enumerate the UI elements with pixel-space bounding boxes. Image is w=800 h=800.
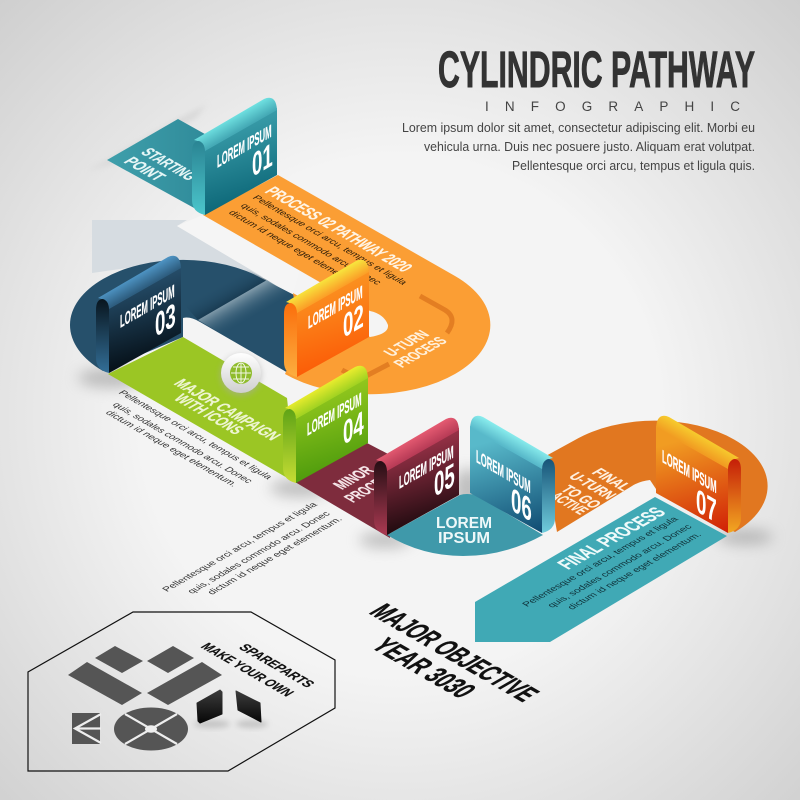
block 06 <box>470 416 555 533</box>
panel: dark blue U-turn band <box>70 260 300 377</box>
white strip beside the arrow <box>177 215 300 293</box>
grey arrow backdrop <box>92 220 263 277</box>
heading: process 02 pathway: PROCESS 02 PATHWAY 2020 <box>261 184 417 275</box>
label: lorem ipsum: LOREM <box>436 515 492 532</box>
intro text: vehicula urna. Duis nec posuere justo. Aliquam erat volutpat. <box>424 140 755 154</box>
block 06: LOREM IPSUM <box>476 446 531 498</box>
label: final u-turn to go active: TO GO <box>557 483 604 511</box>
panel: orange U-turn band <box>203 175 490 394</box>
block 03: LOREM IPSUM <box>120 280 175 332</box>
label: lorem ipsum <box>436 515 492 547</box>
label: spareparts make your own: SPAREPARTS <box>235 641 319 690</box>
intro text: Pellentesque orci arcu, tempus et ligula quis. <box>512 159 755 173</box>
block 01: 01 <box>252 135 273 184</box>
label: minor process <box>329 463 401 505</box>
intro text: Lorem ipsum dolor sit amet, consectetur adipiscing elit. Morbi eu <box>402 121 755 135</box>
block 02: LOREM IPSUM <box>308 281 363 333</box>
label: final u-turn to go active <box>546 466 634 517</box>
label: u-turn process: U-TURN <box>381 328 434 359</box>
label: minor process: MINOR <box>329 463 378 492</box>
heading: major objective: MAJOR OBJECTIVE <box>362 600 546 706</box>
block 05: 05 <box>434 455 455 504</box>
final process body text: quis, sodales commodo arcu. Donec <box>545 523 695 610</box>
heading: major objective <box>362 600 546 706</box>
final process body text: dictum id neque eget elementum. <box>565 531 704 612</box>
text block: lower left description: Pellentesque orci arcu, tempus et ligula <box>160 501 321 594</box>
label: lorem ipsum: IPSUM <box>438 530 490 547</box>
block 04: LOREM IPSUM <box>307 388 362 440</box>
orange band body text: Pellentesque orci arcu, tempus et ligula <box>249 194 410 287</box>
block 07: 07 <box>696 481 717 530</box>
soft ground shadows <box>78 368 773 548</box>
label: starting point: POINT <box>120 154 170 184</box>
heading: major campaign with icons: WITH ICONS <box>170 391 248 437</box>
panel: final process band <box>475 497 727 642</box>
text block: lower left description: quis, sodales commodo arcu. Donec <box>185 510 333 596</box>
panel: spareparts <box>28 612 335 771</box>
block 02: 02 <box>343 296 364 345</box>
panel: teal lorem ipsum sector <box>387 494 543 556</box>
label: starting point <box>120 145 201 184</box>
panel: final orange U-turn band <box>544 421 768 532</box>
block 01: LOREM IPSUM <box>217 120 272 172</box>
text block: green band description: Pellentesque orci arcu, tempus et ligula <box>115 389 275 481</box>
panel: green campaign band <box>108 337 296 483</box>
block 07 <box>656 416 741 533</box>
spare part: disc <box>114 708 188 750</box>
block 02 <box>284 260 369 377</box>
label: final u-turn to go active: ACTIVE <box>546 490 592 517</box>
icon: globe button <box>220 353 262 396</box>
intro text <box>402 121 755 173</box>
orange band body text: quis, sodales commodo arcu. Donec <box>237 202 384 287</box>
text block: green band description: quis, sodales commodo arcu. Donec <box>109 401 255 485</box>
block 06: 06 <box>511 480 532 529</box>
final process body text: Pellentesque orci arcu, tempus et ligula <box>520 515 682 609</box>
heading: major objective: YEAR 3030 <box>364 634 483 703</box>
label: minor process: PROCESS <box>340 469 401 505</box>
spare part: arrow tile <box>72 713 101 744</box>
spare part: mini blocks <box>194 690 268 728</box>
label: spareparts make your own: MAKE YOUR OWN <box>197 640 298 699</box>
band shade <box>180 268 267 320</box>
starting band shadow <box>87 104 207 171</box>
label: final u-turn to go active: FINAL <box>588 466 634 494</box>
label: u-turn process: PROCESS <box>391 335 452 370</box>
heading: major campaign with icons: MAJOR CAMPAIGN <box>170 376 285 443</box>
heading: final process: FINAL PROCESS <box>553 504 671 573</box>
spare part: tiles <box>68 646 222 705</box>
label: final u-turn to go active: U-TURN <box>565 470 619 502</box>
text block: lower left description: dictum id neque eget elementum. <box>205 515 345 597</box>
label: u-turn process <box>381 328 452 370</box>
block 04 <box>283 366 368 483</box>
block 03 <box>96 256 181 373</box>
band highlight <box>198 280 290 334</box>
subtitle: INFOGRAPHIC <box>485 99 740 114</box>
block 05: LOREM IPSUM <box>399 441 454 493</box>
heading: major campaign with icons <box>170 376 285 443</box>
panel: minor process band <box>295 443 401 538</box>
block 03: 03 <box>155 295 176 344</box>
panel: starting band <box>107 119 212 214</box>
block 07: LOREM IPSUM <box>662 446 717 498</box>
orange band body text: dictum id neque eget elementum. <box>225 209 365 290</box>
label: starting point: STARTING <box>137 145 201 183</box>
arrow: u-turn direction <box>342 296 452 376</box>
block 01 <box>192 98 277 215</box>
text block: green band description: dictum id neque eget elementum. <box>102 409 240 489</box>
block 05 <box>374 418 459 535</box>
block 04: 04 <box>343 403 364 452</box>
